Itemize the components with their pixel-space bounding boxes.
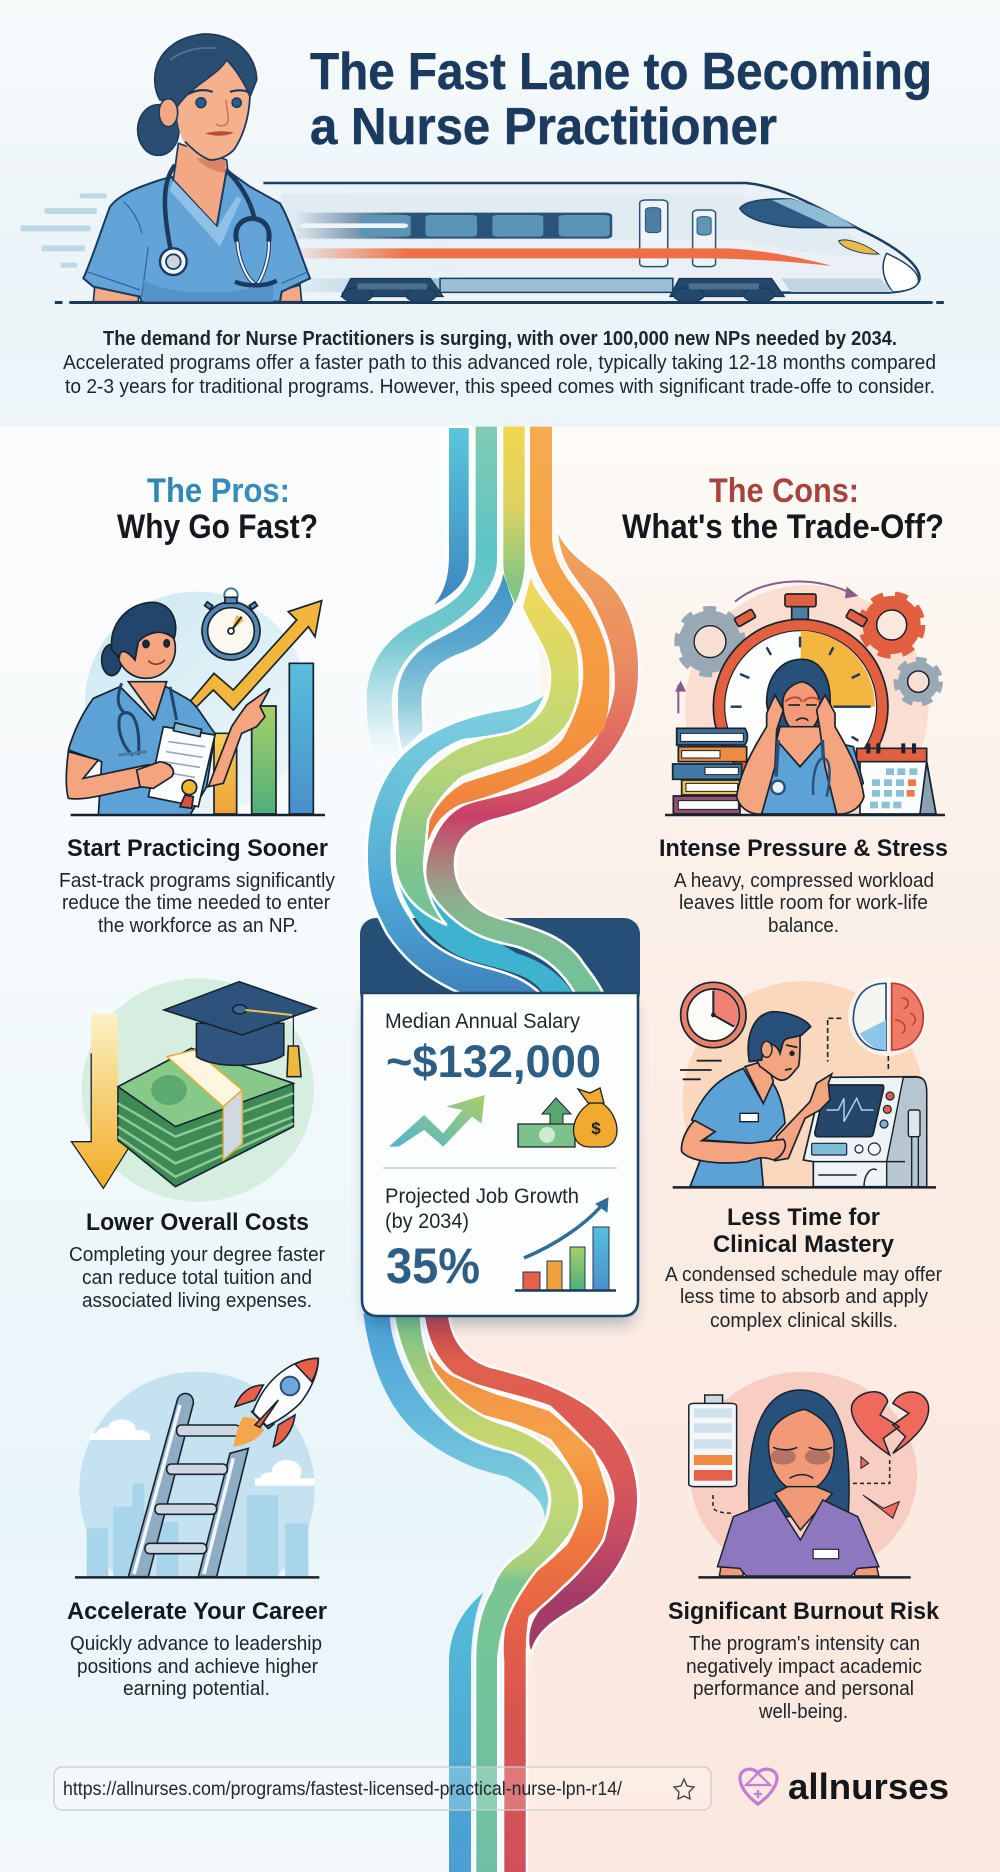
item: less time for clinical mastery [665, 1204, 942, 1332]
item: significant burnout risk: negatively impact academic [686, 1656, 922, 1678]
ribbon: lower red [423, 1313, 638, 1653]
item: start practicing sooner: reduce the time needed to enter [62, 892, 330, 914]
title [310, 43, 932, 156]
allnurses logo: allnurses [788, 1766, 949, 1807]
broken heart [851, 1392, 929, 1455]
intro text: The demand for Nurse Practitioners is surging, with over 100,000 new NPs needed by 2034. [103, 328, 897, 350]
ribbon: blue wedge top [428, 427, 470, 610]
item: less time for clinical mastery: A condensed schedule may offer [665, 1264, 942, 1286]
battery [705, 1395, 723, 1405]
item: start practicing sooner: Fast-track programs significantly [59, 870, 335, 892]
salary value: ~$132,000 [386, 1036, 601, 1087]
cons heading: What's the Trade-Off? [622, 508, 944, 546]
title: The Fast Lane to Becoming [310, 43, 932, 101]
item: intense pressure and stress: Intense Pressure & Stress [659, 835, 948, 862]
item: significant burnout risk: performance and personal [693, 1678, 914, 1700]
icon: stressed nurse with stopwatch [665, 581, 945, 828]
ribbon: lower orange to red, down to the bottom [420, 1320, 610, 1872]
pros heading [117, 472, 318, 546]
bogies [341, 278, 784, 302]
item: less time for clinical mastery: Clinical Mastery [713, 1231, 895, 1258]
calendar [860, 762, 936, 814]
item: lower overall costs: can reduce total tuition and [82, 1267, 312, 1289]
card header backing [360, 918, 640, 1008]
person [690, 1150, 763, 1187]
item: intense pressure and stress: balance. [768, 915, 839, 937]
item: start practicing sooner: Start Practicing Sooner [67, 835, 328, 862]
item: significant burnout risk: The program's intensity can [689, 1633, 920, 1655]
ribbon: yellow to green [395, 573, 580, 925]
pros heading: Why Go Fast? [117, 508, 318, 546]
bar chart with trend arrow [515, 1198, 616, 1290]
title: a Nurse Practitioner [310, 98, 777, 156]
down arrow [71, 1013, 133, 1188]
graduation cap [196, 1023, 284, 1065]
item: intense pressure and stress: leaves little room for work-life [679, 892, 928, 914]
icon: graduation cap on cash stack with down arrow [71, 978, 316, 1202]
speed lines [20, 193, 107, 268]
ribbon: orange to crimson to green [425, 527, 639, 993]
item: accelerate your career [67, 1598, 327, 1700]
intro text: Accelerated programs offer a faster path to this advanced role, typically taking 12-18 months compared [63, 352, 936, 374]
ribbon: lower blue [363, 1313, 548, 1518]
job growth label: Projected Job Growth [385, 1185, 579, 1208]
icon: nurse at monitor with clock and brain [672, 978, 936, 1189]
icon: high-speed train [263, 183, 920, 302]
item: less time for clinical mastery: Less Time for [727, 1204, 880, 1231]
item: accelerate your career: Accelerate Your Career [67, 1598, 327, 1625]
item: start practicing sooner: the workforce as an NP. [98, 915, 298, 937]
ribbon: yellow to green wedge [503, 427, 525, 603]
item: less time for clinical mastery: complex clinical skills. [710, 1310, 898, 1332]
clock [681, 982, 746, 1048]
icon: zigzag growth arrow [389, 1095, 485, 1147]
books [677, 728, 747, 745]
ground line [55, 301, 944, 304]
item: intense pressure and stress: A heavy, compressed workload [674, 870, 934, 892]
machine [803, 1077, 927, 1187]
cash stack [118, 1048, 293, 1187]
item: intense pressure and stress [659, 835, 948, 937]
salary label: Median Annual Salary [385, 1010, 580, 1033]
intro text [63, 328, 936, 398]
icon: cash and money bag: $ [591, 1119, 601, 1138]
icon: nurse with stethoscope [83, 34, 310, 302]
icon: cash and money bag [518, 1088, 617, 1147]
pros heading: The Pros: [147, 472, 290, 510]
item: start practicing sooner [59, 835, 335, 937]
icon: burned-out nurse with low battery and broken heart [689, 1372, 929, 1578]
ribbon: orange [424, 427, 609, 877]
item: less time for clinical mastery: less time to absorb and apply [680, 1286, 928, 1308]
stats card [362, 993, 638, 1326]
woman [767, 659, 830, 743]
cons heading [622, 472, 944, 546]
stats card: (by 2034) [385, 1210, 469, 1233]
ribbon: lower green, down to the bottom [393, 1313, 580, 1872]
item: lower overall costs [69, 1209, 325, 1312]
ribbon: outer blue [367, 692, 547, 993]
central rainbow ribbons [363, 427, 639, 1872]
cons heading: The Cons: [709, 472, 859, 510]
divider [383, 1167, 617, 1169]
icon: nurse with growth chart [66, 588, 325, 815]
url bar: https://allnurses.com/programs/fastest-licensed-practical-nurse-lpn-r14/ [63, 1778, 623, 1800]
item: lower overall costs: Lower Overall Costs [86, 1209, 309, 1236]
ribbon: inner blue loop [397, 568, 515, 752]
brain [848, 977, 927, 1056]
item: significant burnout risk [668, 1598, 940, 1723]
item: lower overall costs: Completing your degree faster [69, 1244, 325, 1266]
icon: star [674, 1779, 694, 1799]
item: significant burnout risk: well-being. [758, 1701, 848, 1723]
icon: heart logo [740, 1769, 777, 1804]
icon: rocket [233, 1358, 318, 1447]
ribbon: outer teal loop [367, 427, 497, 767]
icon: ladder and rocket [75, 1358, 320, 1579]
job growth value: 35% [386, 1238, 480, 1294]
item: lower overall costs: associated living expenses. [82, 1290, 312, 1312]
header illustration: speed lines and train [20, 183, 920, 302]
item: accelerate your career: earning potential. [123, 1678, 270, 1700]
item: accelerate your career: Quickly advance to leadership [70, 1633, 322, 1655]
ribbon: bottom blue straight [449, 1593, 483, 1872]
intro text: to 2-3 years for traditional programs. However, this speed comes with significant trade-offe to consider. [65, 376, 935, 398]
item: significant burnout risk: Significant Burnout Risk [668, 1598, 940, 1625]
url bar [54, 1767, 711, 1810]
ribbon: teal middle [395, 863, 573, 993]
item: accelerate your career: positions and achieve higher [77, 1656, 318, 1678]
